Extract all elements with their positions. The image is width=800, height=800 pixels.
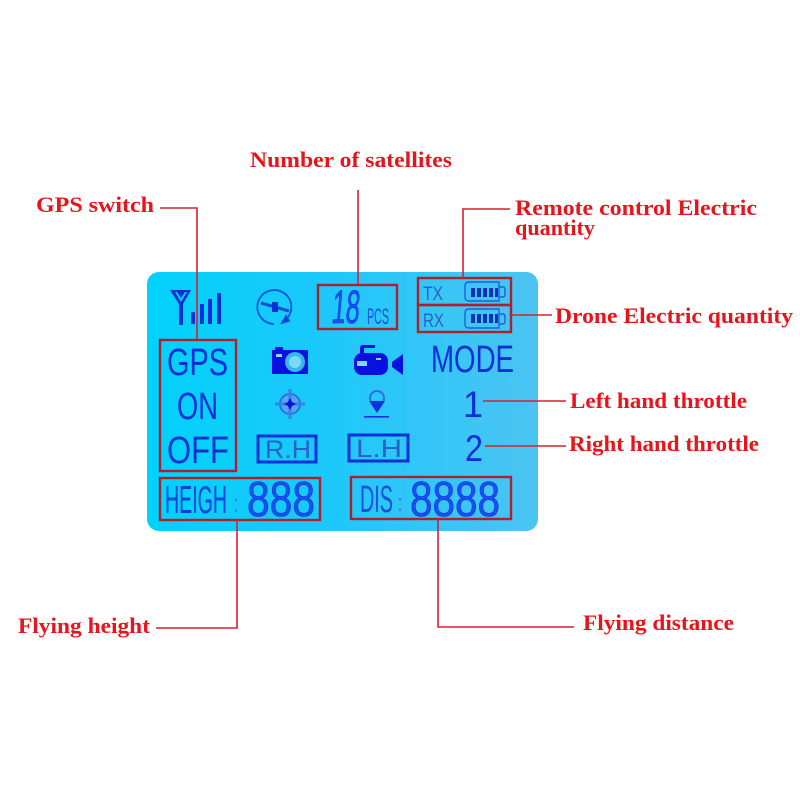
- icon: map pin: [364, 391, 389, 418]
- label: TX: TX: [423, 284, 443, 305]
- icon: R.H badge: R.H: [265, 436, 311, 464]
- icon: RX battery: [465, 309, 505, 328]
- icon: target: [275, 389, 305, 419]
- TX battery indicator: [423, 282, 505, 305]
- digits: 18: 18: [330, 280, 362, 333]
- label: Right hand throttle: Right hand throttle: [569, 431, 759, 456]
- icon: signal antenna: [170, 290, 221, 325]
- text: 2: 2: [465, 428, 483, 469]
- text: 1: 1: [463, 384, 483, 425]
- label: RX: RX: [423, 311, 444, 332]
- label: Remote control Electric quantity: Remote control Electric: [515, 195, 757, 220]
- colon: :: [397, 490, 403, 517]
- leader lines: [156, 190, 574, 628]
- colon: :: [233, 491, 239, 518]
- GPS state text: [167, 342, 229, 472]
- text: MODE: MODE: [431, 339, 514, 381]
- distance readout: [360, 473, 500, 527]
- callout boxes: [160, 278, 511, 520]
- icon: satellite: [257, 290, 291, 324]
- GPS state text: ON: [177, 386, 218, 428]
- infographic: LCD display diagram: PCS: [367, 304, 389, 329]
- label: Flying height: Flying height: [18, 613, 151, 638]
- satellite count: [330, 280, 389, 333]
- digits: 8888: 8888: [410, 473, 500, 527]
- label: Drone Electric quantity: Drone Electric quantity: [555, 303, 793, 328]
- label: DIS: DIS: [360, 479, 393, 521]
- RX battery indicator: [423, 309, 505, 332]
- label: Remote control Electric quantity: quantity: [515, 215, 595, 240]
- panel: LCD screen: [147, 272, 538, 531]
- icon: L.H badge: [349, 435, 408, 463]
- label: HEIGH: HEIGH: [165, 479, 227, 522]
- GPS state text: OFF: [167, 430, 229, 472]
- icon: video camera: [354, 345, 403, 375]
- label: Number of satellites: Number of satellites: [250, 147, 452, 172]
- label: Flying distance: Flying distance: [583, 610, 734, 635]
- label: GPS switch: GPS switch: [36, 192, 154, 217]
- icon: L.H badge: L.H: [356, 435, 402, 463]
- icon: TX battery: [465, 282, 505, 301]
- label: Remote control Electric quantity: [515, 195, 757, 240]
- GPS state text: GPS: [167, 342, 228, 384]
- icon: camera: [272, 347, 308, 374]
- digits: 888: 888: [247, 473, 315, 527]
- height readout: [165, 473, 315, 527]
- label: Left hand throttle: Left hand throttle: [570, 388, 747, 413]
